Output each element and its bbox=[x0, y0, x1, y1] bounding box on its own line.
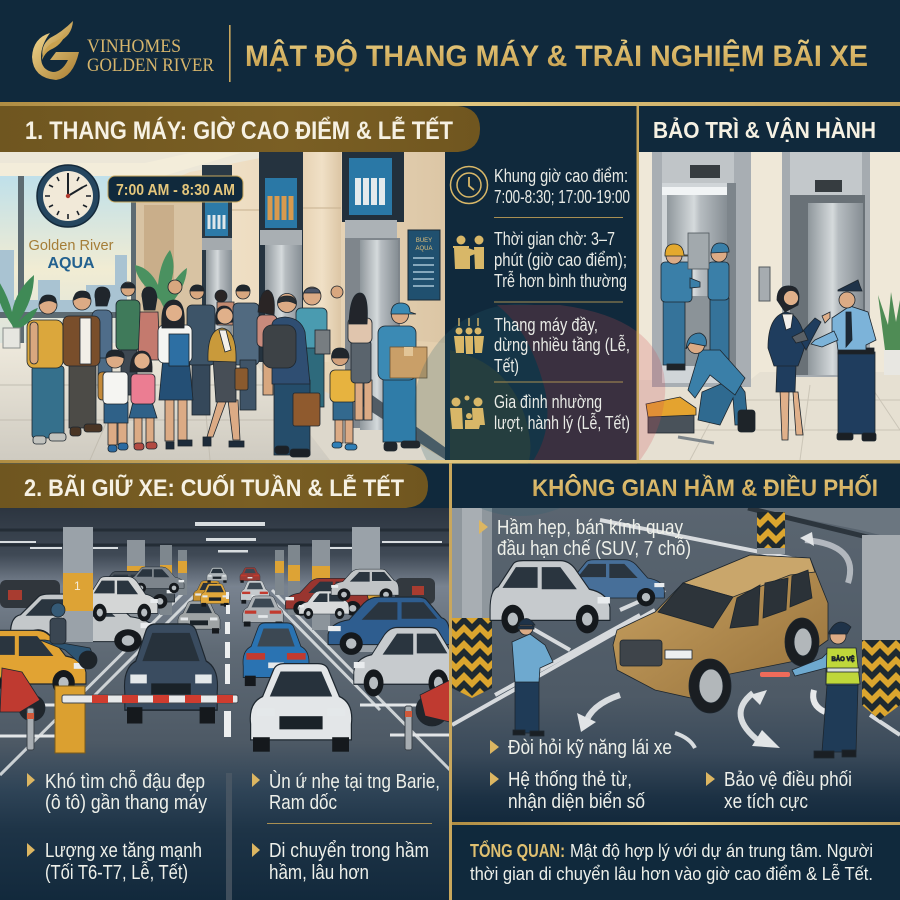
bullet: guards bbox=[706, 769, 852, 813]
person: woman with folder bbox=[158, 300, 193, 449]
baton bbox=[760, 672, 790, 677]
fact: families: Gia đình nhường bbox=[494, 392, 602, 412]
bullet: volume bbox=[27, 840, 202, 884]
person: woman at elevator bbox=[348, 293, 372, 420]
bullet: barrier: Ùn ứ nhẹ tại tng Barie, bbox=[269, 770, 440, 793]
fact: full elevators: dừng nhiều tầng (Lễ, bbox=[494, 334, 630, 355]
bullet: narrow: Hầm hẹp, bán kính quay bbox=[497, 517, 683, 539]
vertical gold rule lower bbox=[449, 463, 452, 900]
section 1 pill bbox=[0, 106, 638, 152]
panel: maintenance scene bbox=[639, 152, 900, 460]
directory sign bbox=[408, 230, 440, 300]
worker kneeling bbox=[686, 333, 755, 432]
ceiling bbox=[0, 152, 260, 195]
bullet: narrow: đầu hạn chế (SUV, 7 chỗ) bbox=[497, 537, 691, 560]
window label bbox=[28, 238, 114, 272]
fact: peak hours: 7:00-8:30; 17:00-19:00 bbox=[494, 187, 630, 207]
fact: wait time: phút (giờ cao điểm); bbox=[494, 250, 627, 270]
person: boy yellow bbox=[330, 348, 357, 450]
person: delivery man bbox=[378, 303, 427, 451]
icon: clock bbox=[450, 166, 488, 204]
bullet: volume: (Tối T6-T7, Lễ, Tết) bbox=[45, 861, 188, 884]
bullet: card system bbox=[490, 769, 645, 813]
window bbox=[0, 176, 136, 346]
pillar 1 bbox=[63, 527, 93, 642]
bullet: moving: hầm, lâu hơn bbox=[269, 862, 369, 884]
elevator 1 bbox=[202, 165, 232, 355]
header bbox=[32, 21, 868, 82]
floor bbox=[639, 372, 900, 460]
person: man with backpack bbox=[263, 294, 320, 457]
bullet: guards: Bảo vệ điều phối bbox=[724, 769, 852, 791]
bullet: narrow bbox=[479, 517, 691, 560]
bullet: guards: xe tích cực bbox=[724, 791, 808, 813]
panel: parking scene bbox=[0, 508, 458, 900]
person: man brown jacket bbox=[63, 291, 102, 436]
red scooter right bbox=[416, 680, 450, 726]
bollards bbox=[27, 706, 412, 750]
barrier bbox=[55, 686, 238, 753]
directory sign: AQUA bbox=[415, 246, 433, 252]
red scooter left bbox=[0, 668, 45, 721]
tunnel heading: KHÔNG GIAN HẦM & ĐIỀU PHỐI bbox=[532, 474, 878, 502]
person: girl pink bbox=[129, 351, 157, 450]
car: silver suv left bbox=[10, 594, 156, 652]
icon: two people bbox=[453, 236, 484, 269]
logo text bbox=[87, 37, 215, 76]
call button bbox=[759, 267, 770, 301]
motorbike rider bbox=[40, 603, 97, 669]
worker helmet bbox=[661, 244, 700, 370]
distant cars bbox=[97, 567, 399, 634]
tunnel bullet list bbox=[479, 517, 852, 813]
logo text: GOLDEN RIVER bbox=[87, 56, 215, 76]
fact: families: lượt, hành lý (Lễ, Tết) bbox=[494, 412, 630, 433]
clock bbox=[37, 165, 99, 227]
elevator 3 bbox=[342, 152, 404, 430]
car: silver car right bbox=[354, 627, 458, 697]
ceiling beam bbox=[750, 508, 900, 540]
pillar 1: 1 bbox=[74, 579, 81, 593]
parking bullet list bbox=[27, 770, 440, 884]
directory sign: BUEY bbox=[416, 238, 432, 244]
person: man yellow polo bbox=[27, 295, 66, 444]
panel: lobby scene bbox=[0, 152, 446, 460]
far pillars: 3 bbox=[362, 579, 369, 593]
fact: wait time: Trễ hơn bình thường bbox=[494, 270, 627, 291]
bullet: barrier bbox=[252, 770, 440, 814]
bullet: card system: nhận diện biển số bbox=[508, 791, 645, 813]
guard left bbox=[512, 618, 553, 736]
heading: 2. BÃI GIỮ XE: CUỐI TUẦN & LỄ TẾT bbox=[24, 473, 404, 502]
far pillars bbox=[127, 527, 380, 652]
summary bbox=[452, 822, 900, 900]
car: blue sedan bbox=[243, 623, 309, 686]
fact: families bbox=[494, 392, 630, 433]
lane markings bbox=[0, 590, 450, 775]
plant bbox=[878, 292, 900, 375]
gold rule: top bbox=[0, 102, 900, 106]
car: silver sedan bbox=[490, 561, 610, 633]
fact: wait time: Thời gian chờ: 3–7 bbox=[494, 229, 615, 249]
window label: Golden River bbox=[28, 238, 114, 254]
summary: thời gian di chuyển lâu hơn vào giờ cao điểm & Lễ Tết. bbox=[470, 863, 873, 884]
time badge: 7:00 AM - 8:30 AM bbox=[116, 182, 235, 199]
security guard bbox=[811, 280, 876, 441]
bullet: spot: (ô tô) gần thang máy bbox=[45, 792, 207, 814]
plants bbox=[0, 250, 187, 348]
bullet: moving: Di chuyển trong hầm bbox=[269, 840, 429, 862]
logo text: VINHOMES bbox=[87, 37, 181, 57]
panel: tunnel scene bbox=[452, 508, 900, 822]
bullet: spot bbox=[27, 770, 207, 814]
woman manager bbox=[768, 286, 830, 440]
person: woman blazer bbox=[203, 306, 248, 447]
car: yellow left bbox=[0, 630, 86, 696]
car: gold suv bbox=[613, 555, 828, 713]
vertical gold rule bbox=[636, 106, 639, 460]
worker with cap bbox=[688, 233, 729, 366]
left pillar bbox=[452, 508, 492, 698]
elevator left bbox=[652, 152, 751, 388]
car: blue suv right bbox=[328, 597, 450, 655]
maintenance heading bbox=[639, 106, 900, 152]
gold rule: middle bbox=[0, 460, 900, 464]
back hazard pillar bbox=[757, 512, 785, 554]
person: boy backpack bbox=[98, 350, 128, 452]
parked motorbikes rear bbox=[0, 578, 435, 608]
background queue bbox=[92, 280, 343, 415]
heading: 1. THANG MÁY: GIỜ CAO ĐIỂM & LỄ TẾT bbox=[25, 115, 453, 145]
right pillar bbox=[862, 535, 900, 720]
time badge bbox=[108, 176, 243, 202]
fact: peak hours: Khung giờ cao điểm: bbox=[494, 166, 628, 186]
section 2 pill bbox=[0, 464, 449, 508]
road lines bbox=[452, 520, 900, 735]
bullet: volume: Lượng xe tăng mạnh bbox=[45, 840, 202, 862]
car: white mercedes bbox=[250, 664, 352, 752]
elevator fact list bbox=[450, 166, 630, 433]
guard right bbox=[792, 622, 860, 758]
fact: wait time bbox=[494, 229, 627, 291]
bullet: skill: Đòi hỏi kỹ năng lái xe bbox=[508, 737, 672, 759]
car: blue sedan behind bbox=[568, 560, 664, 606]
tunnel heading bbox=[452, 464, 900, 508]
maintenance heading: BẢO TRÌ & VẬN HÀNH bbox=[653, 115, 876, 143]
panel: section 1 list background bbox=[445, 152, 637, 460]
summary: TỔNG QUAN: bbox=[470, 840, 565, 861]
center dashes bbox=[224, 592, 231, 737]
icon: family bbox=[450, 396, 485, 429]
bullet: barrier: Ram dốc bbox=[269, 792, 337, 814]
fact: full elevators: Tết) bbox=[494, 356, 519, 376]
guard right: BẢO VỆ bbox=[831, 655, 855, 663]
curved arrows bbox=[585, 540, 850, 748]
arrow heads bbox=[577, 532, 814, 748]
ceiling beams bbox=[0, 525, 450, 545]
bullet: spot: Khó tìm chỗ đậu đẹp bbox=[45, 770, 205, 793]
header divider bbox=[229, 25, 231, 82]
car: silver suv behind bbox=[86, 577, 158, 621]
bullet: card system: Hệ thống thẻ từ, bbox=[508, 769, 632, 791]
fact: peak hours bbox=[494, 166, 630, 207]
watermark bbox=[414, 304, 665, 516]
summary: Mật độ hợp lý với dự án trung tâm. Người bbox=[570, 841, 873, 861]
fact: full elevators: Thang máy đầy, bbox=[494, 315, 598, 335]
fact: full elevators bbox=[494, 315, 630, 376]
person: teal staff bbox=[296, 287, 330, 407]
elevator right bbox=[782, 152, 870, 377]
bullet: moving bbox=[252, 840, 429, 884]
icon: people with arrows bbox=[454, 318, 484, 354]
elevator 2 bbox=[259, 152, 303, 370]
toolbox bbox=[646, 397, 714, 443]
logo mark bbox=[32, 21, 79, 80]
title: MẬT ĐỘ THANG MÁY & TRẢI NGHIỆM BÃI XE bbox=[245, 39, 868, 73]
window label: AQUA bbox=[47, 255, 95, 272]
floor bbox=[0, 343, 330, 460]
car: dark suv bbox=[124, 624, 218, 724]
